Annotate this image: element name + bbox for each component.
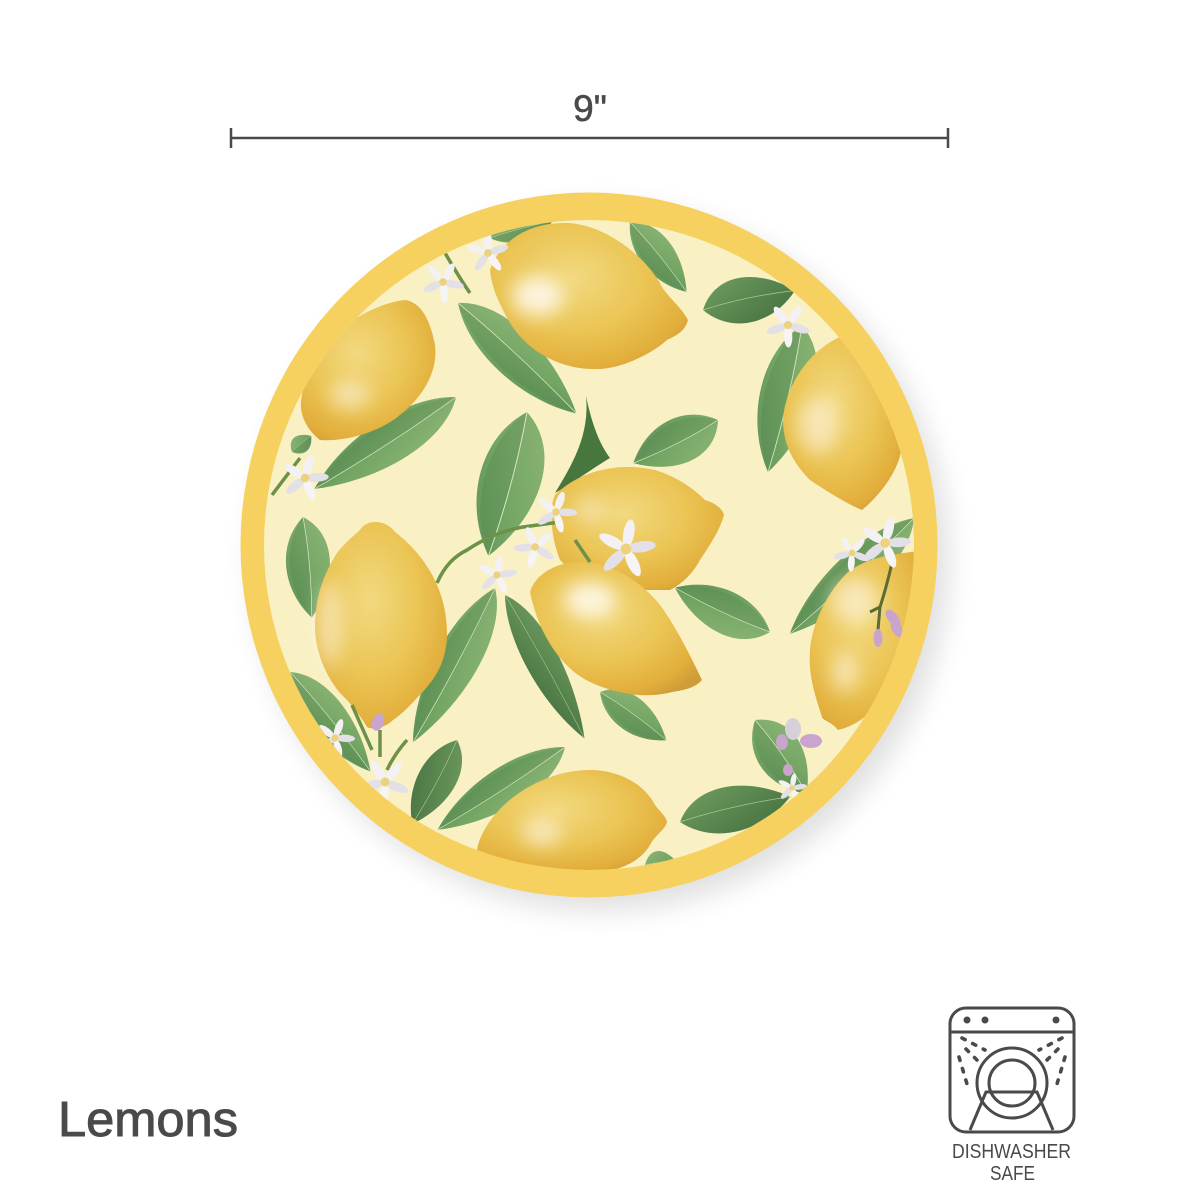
control dots bbox=[964, 1016, 1060, 1024]
dark leaf behind centre lemons bbox=[555, 396, 610, 493]
lemon: centre front bbox=[530, 562, 702, 695]
safe label: SAFE bbox=[990, 1163, 1035, 1185]
lemon: left bbox=[301, 300, 435, 440]
lemon highlights bbox=[317, 276, 879, 846]
plate cream centre with pattern bbox=[250, 209, 930, 880]
dimension label: 9" bbox=[573, 88, 607, 129]
water spray bbox=[959, 1038, 1065, 1084]
dimension line: 9 inch width bbox=[231, 88, 948, 148]
dishwasher label: DISHWASHER bbox=[952, 1141, 1071, 1163]
plate bbox=[240, 192, 949, 911]
lemon: bottom bbox=[477, 770, 667, 872]
lemon: upper right bbox=[783, 337, 902, 510]
leaves bbox=[276, 209, 929, 877]
flowers bbox=[276, 232, 917, 816]
lemons bbox=[301, 223, 925, 872]
stems bbox=[272, 253, 590, 770]
dishwasher body bbox=[950, 1008, 1074, 1132]
plate name: Lemons: Lemons bbox=[58, 1093, 238, 1147]
pink buds bbox=[369, 607, 906, 776]
lemon: large left bbox=[315, 522, 447, 728]
lemon: centre back bbox=[551, 467, 724, 590]
plate shadow bbox=[253, 207, 949, 911]
dimension ruler bbox=[231, 128, 948, 148]
infographic canvas bbox=[62, 94, 1076, 1180]
dark stem with buds bbox=[870, 563, 892, 630]
lemon: lower right bbox=[810, 552, 914, 730]
lemon: top bbox=[490, 223, 688, 369]
plate yellow rim bbox=[240, 192, 938, 898]
icon: dishwasher safe bbox=[950, 1008, 1074, 1185]
cream background bbox=[250, 210, 930, 880]
